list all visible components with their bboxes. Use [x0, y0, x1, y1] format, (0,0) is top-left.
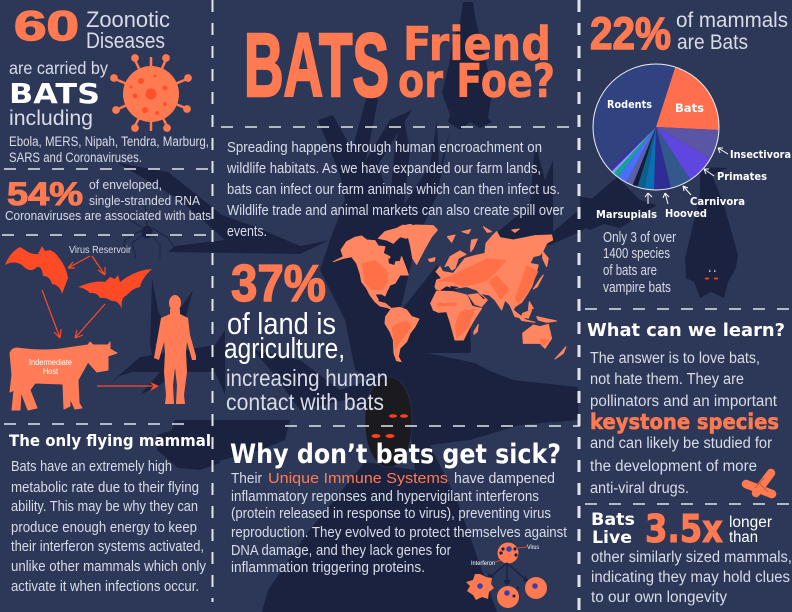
text block: spreading	[226, 140, 564, 240]
panel: why don't bats get sick: DNA damage, and they lack genes for	[231, 543, 451, 559]
panel: what can we learn: pollinators and an important	[590, 393, 778, 410]
title: Friend	[403, 17, 551, 71]
panel: 54 percent statistic	[5, 176, 211, 223]
panel: why don't bats get sick: inflammation triggering proteins.	[231, 560, 425, 576]
panel: the only flying mammal: activate it when infections occur.	[11, 578, 199, 595]
panel: what can we learn: The answer is to love bats,	[590, 350, 760, 367]
panel: 60 zoonotic diseases: Zoonotic	[86, 7, 170, 32]
title: or Foe?	[398, 54, 555, 108]
panel: what can we learn: keystone species	[590, 410, 779, 434]
panel: 60 zoonotic diseases: BATS	[9, 77, 100, 110]
arrowhead: to human	[150, 382, 159, 391]
panel: 22 percent of mammals: of mammals	[676, 8, 788, 32]
panel: what can we learn	[587, 320, 785, 497]
map: americas	[333, 225, 419, 362]
label: rodents: Rodents	[607, 99, 652, 111]
diagram: interferon cells: Virus	[527, 545, 539, 551]
text block: spreading: events.	[227, 224, 267, 240]
panel: bats live longer	[591, 507, 792, 606]
panel: 60 zoonotic diseases: 60	[14, 2, 79, 49]
diagram: interferon cells	[466, 542, 547, 608]
panel: 54 percent statistic: 54%	[7, 176, 83, 212]
panel: 54 percent statistic: of enveloped,	[89, 177, 162, 192]
panel: 54 percent statistic: Coronaviruses are associated with bats	[5, 208, 211, 223]
diagram: interferon cells: Interferon	[471, 561, 495, 567]
panel: why don't bats get sick	[230, 439, 567, 576]
pie labels and arrows: Marsupials	[596, 209, 657, 221]
panel: what can we learn: and can likely be studied for	[590, 435, 772, 452]
panel: 37 percent statistic: contact with bats	[226, 389, 384, 415]
pie labels and arrows	[596, 148, 791, 221]
text block: vampire bats: Only 3 of over	[603, 230, 676, 246]
panel: why don't bats get sick: reproduction. They evolved to protect themselves against	[231, 525, 567, 541]
panel: the only flying mammal: Bats have an extremely high	[11, 458, 172, 475]
panel: 22 percent of mammals: are Bats	[677, 30, 748, 54]
panel: what can we learn: not hate them. They are	[590, 371, 744, 388]
pie labels and arrows: Carnivora	[690, 196, 745, 208]
panel: bats live longer: than	[729, 529, 758, 546]
panel: bats live longer: to our own longevity	[591, 589, 727, 606]
pie labels and arrows: Hooved	[665, 208, 707, 220]
panel: 60 zoonotic diseases: Ebola, MERS, Nipah, Tendra, Marburg,	[9, 134, 209, 149]
background: tree and bat silhouettes	[108, 2, 738, 612]
panel: why don't bats get sick: Why don’t bats get sick?	[230, 439, 561, 470]
text block: vampire bats: of bats are	[603, 263, 657, 279]
label: intermediate host: Host	[43, 367, 59, 376]
panel: 22 percent of mammals	[590, 8, 788, 59]
text block: spreading: Spreading happens through human encroachment on	[227, 140, 542, 156]
label: intermediate host	[29, 358, 72, 376]
panel: 37 percent statistic: of land is	[227, 306, 336, 341]
panel: 37 percent statistic	[224, 255, 388, 415]
icon: human	[154, 295, 196, 404]
panel: transmission diagram	[5, 244, 196, 410]
icon: pills	[746, 473, 772, 494]
panel: 22 percent of mammals: 22%	[590, 8, 671, 59]
title: BATS	[244, 16, 389, 116]
map: old world	[400, 224, 566, 359]
panel: bats live longer: Bats	[591, 510, 635, 530]
panel: the only flying mammal: their interferon systems activated,	[11, 538, 204, 555]
panel: 37 percent statistic: increasing human	[226, 365, 388, 391]
panel: the only flying mammal: metabolic rate due to their flying	[11, 479, 199, 496]
panel: why don't bats get sick: have dampened	[454, 471, 555, 487]
arrows: infection paths	[42, 256, 152, 386]
icon: hanging bat eyes	[705, 269, 718, 280]
panel: 60 zoonotic diseases: including	[9, 106, 93, 130]
panel: the only flying mammal: unlike other mammals which only	[11, 558, 206, 575]
world map	[333, 224, 566, 362]
panel: what can we learn: What can we learn?	[587, 320, 785, 341]
icon: cow	[10, 342, 117, 410]
pie labels and arrows: Primates	[717, 171, 767, 183]
panel: 54 percent statistic: single-stranded RNA	[89, 193, 200, 208]
panel: why don't bats get sick: Their	[231, 471, 262, 487]
text block: spreading: bats can infect our farm animals which can then infect us.	[227, 182, 560, 198]
panel: the only flying mammal: produce enough energy to keep	[11, 519, 197, 536]
icon: bat one	[5, 246, 68, 294]
label: intermediate host: Indermediate	[29, 358, 72, 367]
panel: what can we learn: anti-viral drugs.	[590, 480, 689, 497]
panel: 37 percent statistic: 37%	[231, 255, 326, 313]
text block: spreading: wildlife habitats. As we have expanded our farm lands,	[226, 161, 541, 177]
panel: bats live longer: indicating they may hold clues	[591, 569, 790, 586]
icon: dark figure with red eyes	[365, 377, 412, 467]
label: bats: Bats	[675, 101, 704, 115]
pie chart: mammal species	[593, 64, 719, 190]
panel: 60 zoonotic diseases: are carried by	[9, 58, 108, 78]
panel: why don't bats get sick: Unique Immune Systems	[268, 471, 448, 487]
icon: bat two	[78, 269, 152, 309]
panel: the only flying mammal	[9, 431, 211, 595]
label: virus reservoir: Virus Reservoir	[69, 244, 131, 256]
panel: why don't bats get sick: (protein released in response to virus), preventing virus	[231, 506, 551, 522]
panel: bats live longer: Live	[592, 528, 632, 548]
text block: vampire bats	[603, 230, 676, 296]
panel: 60 zoonotic diseases: Diseases	[86, 28, 165, 53]
icon: coronavirus	[111, 55, 191, 131]
panel: 37 percent statistic: agriculture,	[224, 333, 345, 365]
panel: bats live longer: 3.5x	[645, 507, 723, 551]
panel: the only flying mammal: ability. This may be why they can	[11, 498, 198, 515]
panel: bats live longer: longer	[729, 514, 772, 531]
panel: what can we learn: the development of more	[590, 458, 757, 475]
text block: spreading: Wildlife trade and animal markets can also create spill over	[227, 203, 564, 219]
text block: vampire bats: vampire bats	[603, 280, 671, 296]
panel: why don't bats get sick: inflammatory reponses and hypervigilant interferons	[231, 489, 539, 505]
panel: 60 zoonotic diseases: SARS and Coronaviruses.	[9, 150, 142, 165]
panel: 60 zoonotic diseases	[9, 2, 209, 165]
text block: vampire bats: 1400 species	[603, 246, 670, 262]
panel: the only flying mammal: The only flying mammal	[9, 431, 211, 450]
